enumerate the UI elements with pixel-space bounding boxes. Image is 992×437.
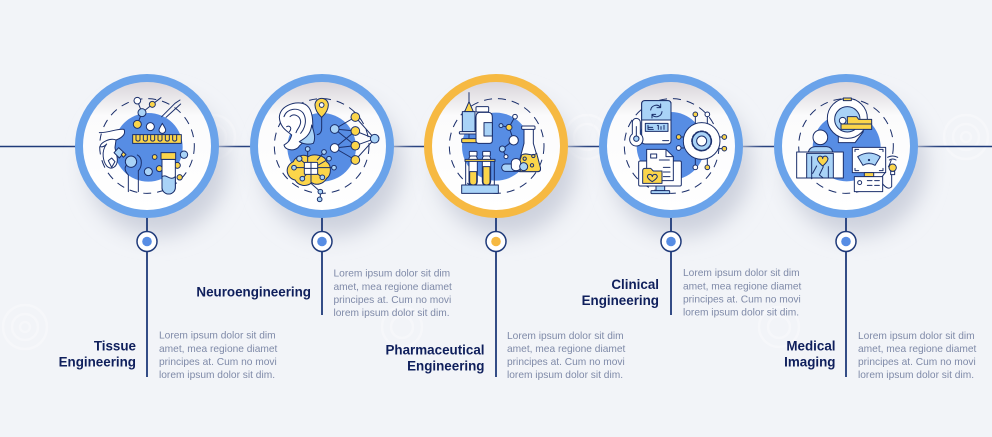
text block 5: Lorem ipsum dolor sit dim bbox=[858, 331, 975, 342]
text block 1: Lorem ipsum dolor sit dim bbox=[159, 331, 276, 342]
icon: pharmaceutical engineering bbox=[449, 93, 544, 193]
step 5: medical imaging bbox=[774, 74, 926, 377]
text block 5: lorem ipsum dolor sit dim. bbox=[858, 370, 974, 381]
heading: pharmaceutical engineering: Engineering bbox=[407, 358, 484, 374]
timeline node 1 bbox=[137, 232, 157, 252]
heading: medical imaging: Medical bbox=[786, 338, 836, 354]
text block 3: lorem ipsum dolor sit dim. bbox=[507, 370, 623, 381]
text block 1: principes at. Cum no movi bbox=[159, 357, 277, 368]
icon: neuroengineering bbox=[274, 98, 379, 202]
text block 4: lorem ipsum dolor sit dim. bbox=[683, 308, 799, 318]
text block 2: lorem ipsum dolor sit dim. bbox=[334, 308, 450, 319]
text block 5: principes at. Cum no movi bbox=[858, 357, 976, 368]
text block 1: lorem ipsum dolor sit dim. bbox=[159, 370, 275, 381]
watermarks bbox=[3, 115, 988, 349]
text block 4: Lorem ipsum dolor sit dim bbox=[683, 268, 800, 279]
heading: pharmaceutical engineering: Pharmaceutical bbox=[386, 342, 484, 358]
step 1: tissue engineering bbox=[75, 74, 227, 377]
heading: tissue engineering: Tissue bbox=[94, 338, 136, 354]
timeline node 2 bbox=[312, 232, 332, 252]
step 2: neuroengineering bbox=[250, 74, 402, 315]
text block 3: principes at. Cum no movi bbox=[507, 357, 625, 368]
text block 1: amet, mea regione diamet bbox=[159, 344, 278, 355]
heading: tissue engineering: Engineering bbox=[59, 354, 136, 370]
timeline node 4 bbox=[661, 232, 681, 252]
text block 2: amet, mea regione diamet bbox=[334, 282, 452, 293]
step 3: pharmaceutical engineering bbox=[424, 74, 576, 377]
heading: medical imaging: Imaging bbox=[784, 354, 836, 370]
text block 3: amet, mea regione diamet bbox=[507, 344, 626, 355]
text block 3: Lorem ipsum dolor sit dim bbox=[507, 331, 624, 342]
icon: tissue engineering bbox=[99, 97, 194, 194]
text block 2: principes at. Cum no movi bbox=[334, 295, 451, 306]
heading: clinical engineering: Engineering bbox=[582, 293, 659, 308]
timeline node 5 bbox=[836, 232, 856, 252]
text block 2: Lorem ipsum dolor sit dim bbox=[334, 269, 450, 280]
step 4: clinical engineering bbox=[599, 74, 751, 315]
timeline horizontal line bbox=[0, 146, 992, 148]
text block 4: amet, mea regione diamet bbox=[683, 281, 802, 292]
heading: neuroengineering: Neuroengineering bbox=[196, 284, 311, 300]
text block 4: principes at. Cum no movi bbox=[683, 294, 801, 306]
heading: clinical engineering: Clinical bbox=[611, 277, 659, 292]
timeline node 3 bbox=[486, 232, 506, 252]
icon: medical imaging bbox=[797, 98, 898, 193]
text block 5: amet, mea regione diamet bbox=[858, 344, 977, 355]
icon: clinical engineering bbox=[624, 99, 727, 194]
